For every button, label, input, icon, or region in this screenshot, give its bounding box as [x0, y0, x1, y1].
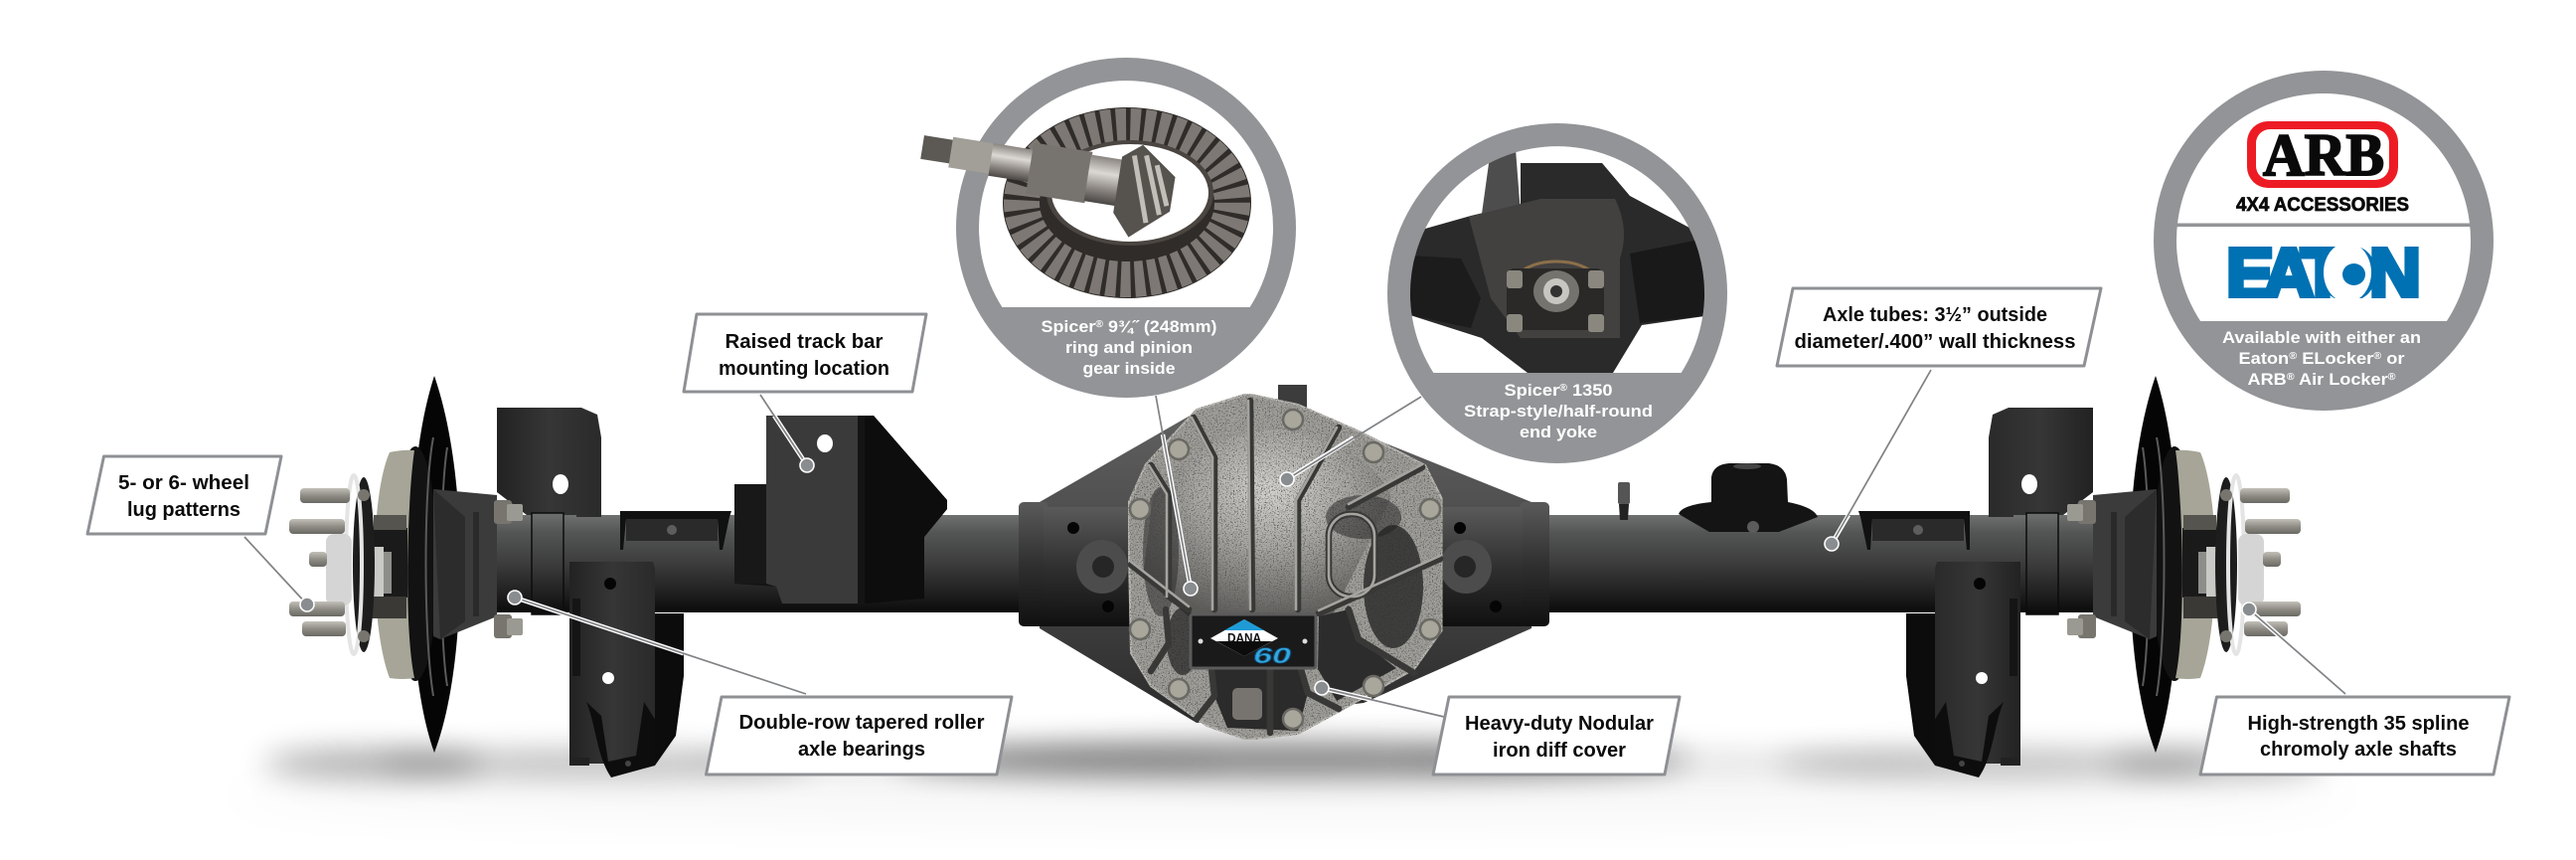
icon: Eaton logo: EATON — [2226, 235, 2421, 314]
yoke caption — [1464, 381, 1653, 441]
callout: lug patterns: lug patterns — [127, 499, 241, 521]
gear caption: 9¾˝ (248mm) — [1103, 317, 1216, 336]
yoke photo — [1410, 149, 1704, 373]
callout: axle tubes — [1777, 288, 2101, 366]
cover bolts — [1130, 410, 1440, 729]
bump stop perch — [1679, 463, 1818, 533]
icon: pinion gear and shaft — [913, 110, 1180, 243]
callout: axle shafts — [2200, 697, 2509, 774]
gear caption: gear inside — [1083, 359, 1175, 378]
panel: ring and pinion circle — [913, 58, 1296, 398]
yoke caption: 1350 — [1567, 381, 1612, 400]
Dana 60 badge: DANA — [1227, 630, 1262, 645]
Dana 60 badge: 60 — [1253, 643, 1292, 668]
icon: ARB logo — [2236, 121, 2409, 216]
locker caption: ® — [2287, 372, 2295, 383]
callout: axle bearings: Double-row tapered roller — [739, 712, 985, 734]
locker caption: ® — [2388, 372, 2396, 383]
callout: track bar: Raised track bar — [725, 331, 884, 353]
panel: locker options circle — [2154, 71, 2494, 411]
locker caption: ® — [2373, 351, 2382, 362]
leader: lug patterns — [244, 537, 314, 611]
icon: ARB logo: ARB — [2263, 122, 2384, 188]
ground shadow — [219, 742, 2365, 819]
Dana 60 badge — [1191, 614, 1316, 668]
panel: end yoke circle — [1387, 123, 1727, 463]
leader: diff cover — [1315, 681, 1444, 717]
left wheel end — [289, 376, 731, 777]
gear caption: ® — [1095, 319, 1104, 330]
callout: axle shafts: High-strength 35 spline — [2248, 713, 2469, 735]
leader: end yoke — [1280, 397, 1421, 486]
callout: axle tubes: Axle tubes: 3½” outside — [1823, 304, 2047, 326]
icon: ARB logo: 4X4 ACCESSORIES — [2236, 195, 2409, 216]
callout: axle bearings — [706, 697, 1012, 774]
track bar bracket — [734, 416, 947, 603]
gear caption: Spicer — [1042, 317, 1092, 336]
callout: axle shafts: chromoly axle shafts — [2260, 739, 2457, 761]
locker caption: or — [2381, 349, 2405, 368]
diff cover — [1128, 394, 1443, 740]
yoke caption: Strap-style/half-round — [1464, 402, 1653, 421]
leader: track bar — [760, 395, 814, 472]
leader: axle shafts — [2242, 602, 2345, 694]
locker caption: ® — [2289, 351, 2298, 362]
leader: ring and pinion — [1156, 396, 1198, 596]
locker caption: ELocker — [2297, 349, 2374, 368]
yoke caption: Spicer — [1505, 381, 1555, 400]
locker caption — [2222, 328, 2421, 389]
icon: ring gear — [1003, 107, 1251, 298]
top fitting — [1278, 385, 1307, 413]
right wheel end — [1858, 376, 2301, 777]
callout: axle bearings: axle bearings — [798, 739, 925, 761]
locker caption: Air Locker — [2295, 370, 2388, 389]
icon: Eaton logo — [2228, 247, 2419, 298]
locker caption: ARB — [2248, 370, 2284, 389]
callout: lug patterns: 5- or 6- wheel — [118, 472, 249, 494]
callout: diff cover: Heavy-duty Nodular — [1465, 713, 1654, 735]
locker caption: Available with either an — [2222, 328, 2421, 347]
axle assembly — [289, 376, 2301, 777]
yoke caption: end yoke — [1520, 423, 1597, 441]
cover ribs — [1131, 401, 1440, 733]
breather vent — [1618, 482, 1630, 520]
axle tube — [487, 515, 2103, 612]
gear caption — [1042, 317, 1216, 378]
gear caption: ring and pinion — [1065, 338, 1193, 357]
callout: axle tubes: diameter/.400” wall thickness — [1795, 331, 2075, 353]
differential housing — [1019, 415, 1549, 723]
leader: axle bearings — [508, 591, 806, 694]
leader: axle tube — [1825, 370, 1931, 551]
callout: diff cover — [1433, 697, 1680, 774]
callout: diff cover: iron diff cover — [1493, 740, 1626, 762]
locker caption: Eaton — [2238, 349, 2286, 368]
yoke caption: ® — [1559, 383, 1568, 394]
callout: track bar: mounting location — [719, 358, 889, 380]
callout: lug patterns — [87, 456, 281, 534]
callout: track bar — [684, 314, 926, 392]
